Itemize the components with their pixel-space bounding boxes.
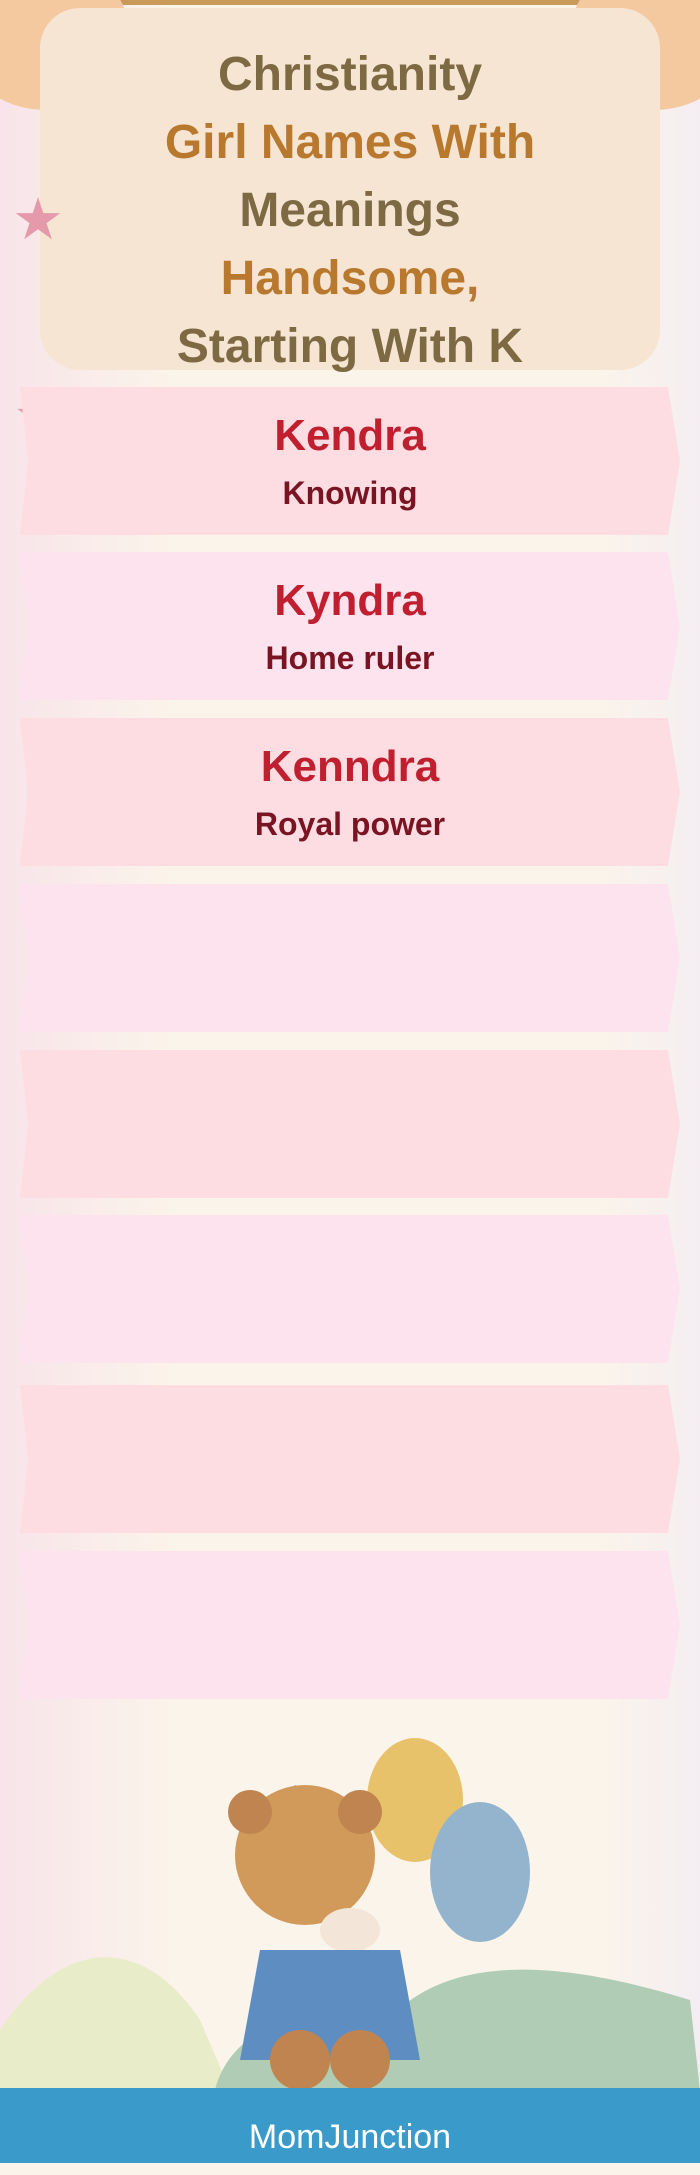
star decoration: ★ — [12, 187, 64, 252]
row 3: Kenndra: Royal power — [255, 806, 445, 842]
title text: Handsome, — [221, 252, 479, 305]
star decoration 2: ★ — [14, 386, 61, 444]
row 1: Kendra — [20, 387, 680, 535]
row 8 empty — [78, 1551, 680, 1699]
row 2: Kyndra — [78, 552, 680, 700]
footer: MomJunction — [249, 2118, 451, 2156]
row 5 empty — [20, 1050, 680, 1198]
title panel — [40, 8, 660, 370]
row 1: Kendra: Knowing — [282, 475, 418, 511]
illustration: hills and teddy bear — [0, 1738, 700, 2088]
row 2: Kyndra: Kyndra — [274, 576, 426, 625]
title text — [165, 48, 535, 373]
title text: Girl Names With — [165, 116, 535, 169]
title text: Christianity — [218, 48, 482, 101]
row 7 empty — [20, 1385, 680, 1533]
footer — [0, 2088, 700, 2163]
title text: Starting With K — [177, 320, 523, 373]
title text: Meanings — [239, 184, 461, 237]
row 6 empty — [78, 1215, 680, 1363]
row 3: Kenndra: Kenndra — [261, 742, 439, 791]
row 3: Kenndra — [20, 718, 680, 866]
row 1: Kendra: Kendra — [274, 411, 426, 460]
row 4 empty — [78, 884, 680, 1032]
top border — [0, 0, 700, 5]
row 2: Kyndra: Home ruler — [266, 640, 434, 676]
decoration: right corner blob — [570, 0, 700, 110]
decoration: corner blobs — [0, 0, 130, 110]
